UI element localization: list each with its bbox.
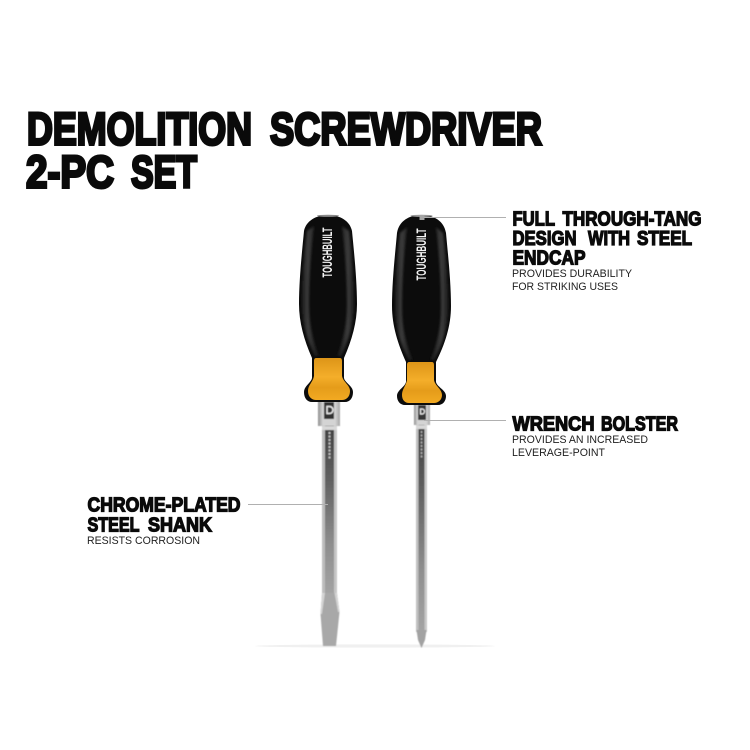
flathead endcap edge xyxy=(317,215,339,217)
steel endcap xyxy=(410,215,432,220)
ground shadow xyxy=(255,644,495,648)
wrench bolster heading: BOLSTER xyxy=(601,414,678,436)
callout: wrench bolster xyxy=(424,414,678,459)
wrench bolster description: LEVERAGE-POINT xyxy=(512,447,605,459)
through-tang heading xyxy=(512,208,702,270)
wrench bolster heading: WRENCH xyxy=(512,414,594,436)
through-tang heading: STEEL xyxy=(637,228,692,250)
title: SCREWDRIVER xyxy=(270,104,542,154)
wrench bolster description xyxy=(512,434,648,459)
phillips shank xyxy=(416,424,427,648)
shank heading: SHANK xyxy=(148,514,212,536)
callout: through-tang xyxy=(424,208,702,293)
through-tang description: FOR STRIKING USES xyxy=(512,281,618,293)
title xyxy=(26,104,542,198)
title: 2-PC xyxy=(26,146,114,198)
through-tang description: PROVIDES DURABILITY xyxy=(512,268,632,280)
flathead logo: TOUGHBUILT xyxy=(320,227,335,278)
flathead shank xyxy=(320,424,340,646)
flathead screwdriver xyxy=(299,215,357,646)
flathead wrench bolster xyxy=(318,401,340,426)
title: DEMOLITION xyxy=(27,104,252,154)
through-tang heading: ENDCAP xyxy=(512,248,586,270)
wrench bolster heading xyxy=(512,414,678,436)
through-tang heading: THROUGH-TANG xyxy=(562,208,702,230)
through-tang description xyxy=(512,268,632,293)
leader line: shank xyxy=(248,504,328,506)
phillips handle xyxy=(392,215,451,405)
shank heading xyxy=(88,494,240,536)
through-tang heading: WITH xyxy=(588,228,630,250)
shank heading: STEEL xyxy=(88,514,140,536)
flathead handle xyxy=(299,215,357,402)
leader line: through-tang xyxy=(424,216,506,218)
phillips screwdriver xyxy=(392,215,451,648)
phillips logo: TOUGHBUILT xyxy=(414,228,429,280)
wrench bolster description: PROVIDES AN INCREASED xyxy=(512,434,648,446)
phillips handle sheen xyxy=(395,227,448,360)
through-tang heading: DESIGN xyxy=(512,228,576,250)
title: SET xyxy=(131,146,197,198)
phillips wrench bolster xyxy=(414,403,430,425)
through-tang heading: FULL xyxy=(512,208,555,230)
leader line: wrench bolster xyxy=(424,420,506,422)
shank description: RESISTS CORROSION xyxy=(87,535,200,547)
phillips yellow grip xyxy=(402,362,442,403)
flathead handle sheen xyxy=(302,226,354,356)
flathead yellow grip xyxy=(308,358,350,400)
shank heading: CHROME-PLATED xyxy=(88,494,240,516)
callout: chrome-plated shank xyxy=(87,494,328,547)
